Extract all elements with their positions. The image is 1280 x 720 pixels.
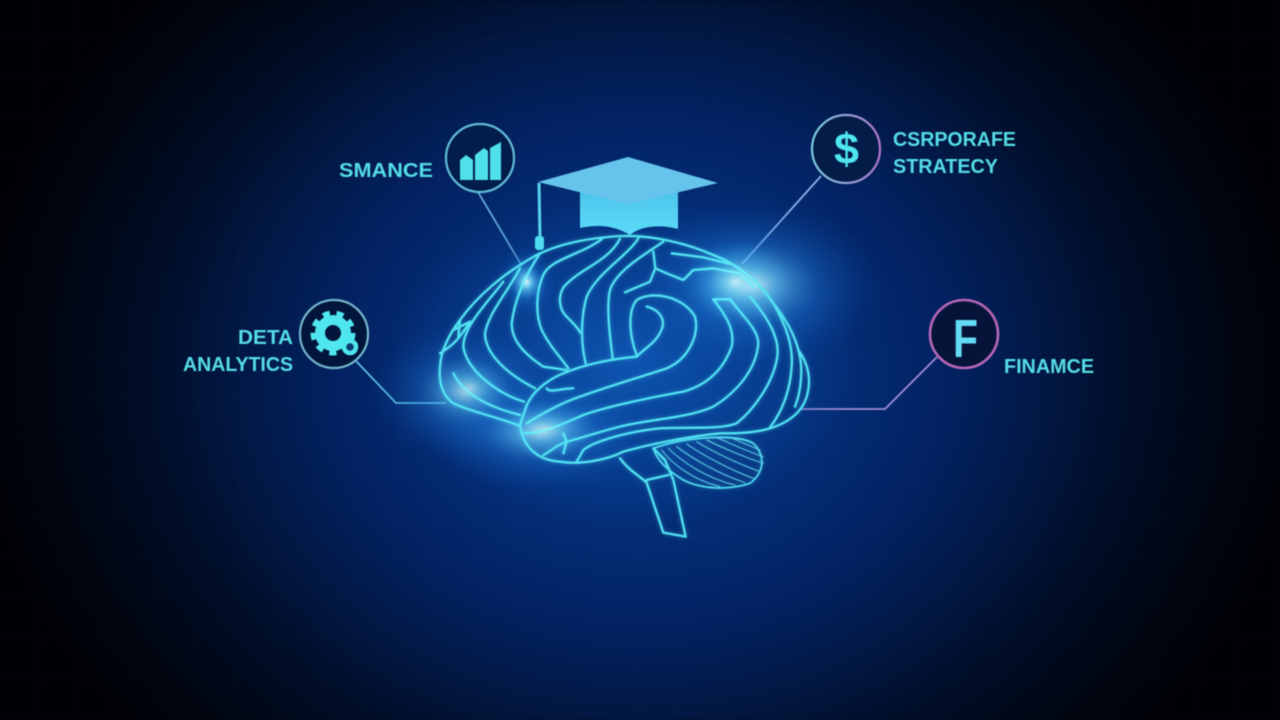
label: corporate strategy <box>893 129 1016 178</box>
brain outline <box>440 236 809 463</box>
brain highlight overlay <box>428 240 790 456</box>
label: finance: FINAMCE <box>1004 356 1094 378</box>
label: chart: SMANCE <box>339 160 433 182</box>
connector lines <box>356 176 937 409</box>
brain folds <box>453 238 778 462</box>
node: gear <box>300 300 368 368</box>
label: corporate strategy: CSRPORAFE <box>893 129 1016 151</box>
tassel <box>535 183 544 250</box>
brain illustration <box>440 236 809 537</box>
cerebellum <box>653 437 763 488</box>
node: finance <box>930 300 998 369</box>
label: data analytics <box>183 327 293 376</box>
label: corporate strategy: STRATECY <box>893 156 999 178</box>
cap base <box>580 190 678 235</box>
cap board <box>538 157 718 204</box>
brain stem <box>620 448 686 537</box>
icon: gear <box>314 314 356 353</box>
node: chart <box>446 124 514 192</box>
label: data analytics: ANALYTICS <box>183 354 293 376</box>
icon: dollar sign: $ <box>834 125 859 174</box>
icon: bar chart <box>460 142 501 180</box>
graduation cap <box>535 157 718 250</box>
brain glow background <box>370 195 880 525</box>
label: data analytics: DETA <box>238 327 293 349</box>
node: corporate strategy <box>812 115 880 183</box>
icon: letter F: F <box>953 309 978 369</box>
